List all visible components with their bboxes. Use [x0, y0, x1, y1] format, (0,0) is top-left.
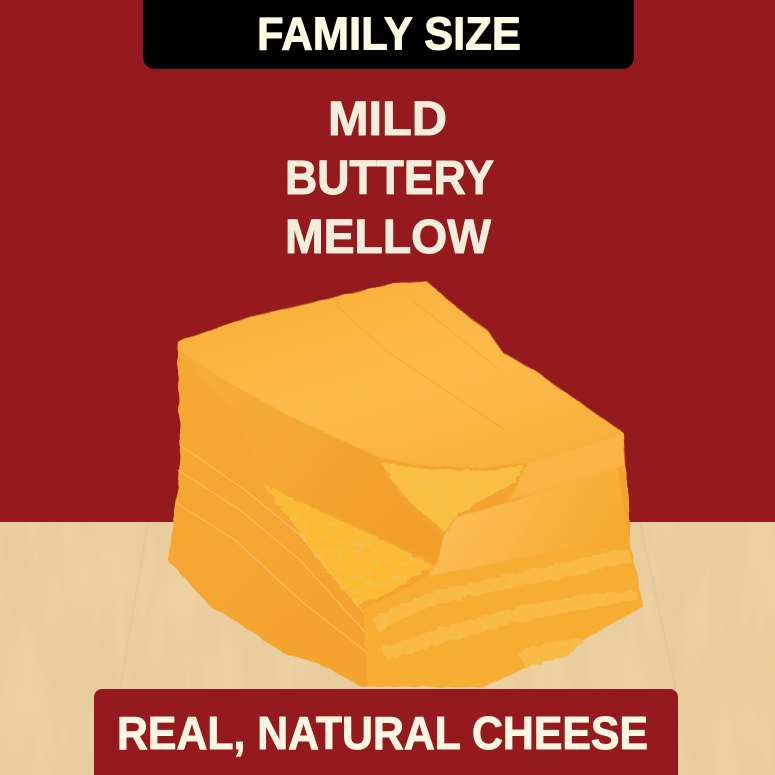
cheese lower right front — [363, 543, 643, 687]
cheese overhanging upper slab — [183, 353, 443, 563]
text: buttery: BUTTERY — [285, 152, 494, 205]
cheese left layered side lines — [176, 445, 372, 655]
background: wooden board — [0, 522, 775, 775]
label: family size black tab — [143, 0, 634, 69]
cheese crumbly strata — [372, 548, 638, 668]
flavour descriptors — [285, 93, 494, 264]
cheese crumbly upper break — [380, 462, 524, 532]
cheese top face — [178, 282, 623, 468]
banner text: REAL, NATURAL CHEESE — [117, 707, 648, 759]
lower stratum — [380, 590, 638, 660]
heading: family size: FAMILY SIZE — [257, 8, 521, 60]
text: mellow: MELLOW — [285, 211, 492, 264]
bottom crumb patch — [518, 640, 585, 668]
cheese crumbly torn cavity — [262, 483, 434, 606]
text: mild: MILD — [328, 93, 447, 146]
banner: real natural cheese — [94, 689, 678, 775]
upper stratum — [372, 548, 632, 632]
cheese right upper rim — [510, 433, 625, 500]
cheese wedge illustration — [168, 282, 643, 687]
cheese top face score lines — [337, 300, 505, 430]
background: red wall — [0, 0, 775, 522]
cheese right front layer — [427, 467, 630, 577]
cheese body silhouette — [168, 282, 643, 687]
